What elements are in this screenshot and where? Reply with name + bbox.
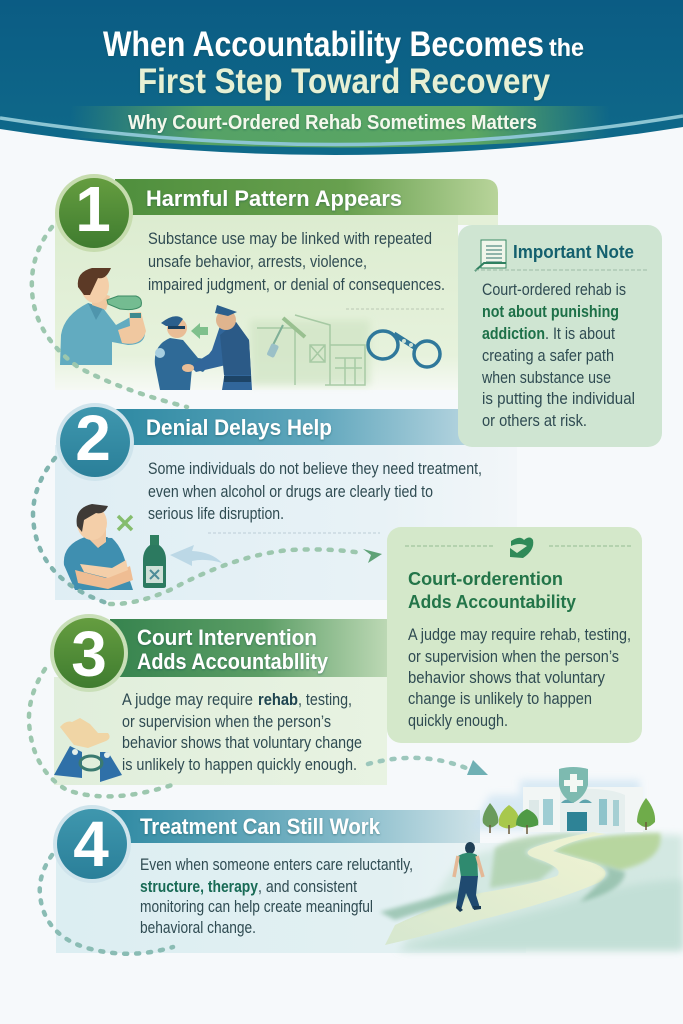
step 3 body text: is unlikely to happen quickly enough. xyxy=(122,756,357,774)
note body text: not about punishing xyxy=(482,303,619,321)
icon: crossed out bottle xyxy=(143,535,166,588)
step 3 heading: Adds Accountabllity xyxy=(137,649,329,674)
note body text: is putting the individual xyxy=(482,390,635,408)
step 2 body text: serious life disruption. xyxy=(148,505,284,523)
callout: important note xyxy=(458,225,662,447)
step 4 body text xyxy=(140,856,413,937)
step 1 header bar xyxy=(115,179,498,215)
step 1 number badge xyxy=(55,173,133,252)
note body text: when substance use xyxy=(481,369,611,387)
step 1 heading: Harmful Pattern Appears xyxy=(146,186,402,211)
step 4 header bar xyxy=(110,810,480,843)
dashed connectors xyxy=(29,227,187,954)
step 3 number badge: 3 xyxy=(71,618,107,690)
step 1 number badge: 1 xyxy=(75,173,111,245)
subtitle ribbon xyxy=(70,106,610,148)
step 1 body text: impaired judgment, or denial of consequences. xyxy=(148,276,445,294)
header banner xyxy=(0,0,683,155)
card body text xyxy=(408,626,631,730)
subtitle: Why Court-Ordered Rehab Sometimes Matters xyxy=(128,112,537,134)
card heading xyxy=(408,568,577,612)
step 3 body text: or supervision when the person’s xyxy=(122,713,331,731)
step 3 body text: rehab xyxy=(258,691,298,709)
card body text: or supervision when the person’s xyxy=(408,648,619,666)
building xyxy=(470,767,643,832)
step 1 body text xyxy=(148,230,445,294)
panel: step 1 xyxy=(55,173,498,390)
step 4 body text: structure, therapy xyxy=(140,878,259,896)
illustration: hands and cuffs xyxy=(54,718,122,782)
title small word: the xyxy=(549,34,584,62)
step 2 heading: Denial Delays Help xyxy=(146,415,332,440)
note body text: addiction xyxy=(482,325,545,343)
step 4 number badge xyxy=(53,805,131,883)
icon: heart arrows xyxy=(510,538,533,558)
step 2 number badge: 2 xyxy=(75,402,111,474)
step 3 header bar xyxy=(110,619,387,677)
title line two: First Step Toward Recovery xyxy=(138,62,550,101)
step 4 number badge: 4 xyxy=(73,808,109,880)
card heading: Court-orderention xyxy=(408,568,563,589)
step 3 body text: , testing, xyxy=(298,691,352,709)
step 1 body text: Substance use may be linked with repeated xyxy=(148,230,432,248)
step 3 body text xyxy=(122,691,362,774)
panel: step 3 xyxy=(50,614,488,785)
note body text: Court-ordered rehab is xyxy=(482,281,626,299)
step 4 body text: behavioral change. xyxy=(140,919,256,937)
icon: document xyxy=(475,240,506,271)
illustration: man drinking xyxy=(60,268,146,365)
illustration: faded building xyxy=(250,315,370,385)
step 3 heading xyxy=(137,625,329,674)
step 3 body text: A judge may require xyxy=(122,691,253,709)
step 3 number badge xyxy=(50,614,128,692)
step 4 body text: , and consistent xyxy=(258,878,357,896)
step 3 heading: Court Intervention xyxy=(137,625,317,650)
trees xyxy=(483,798,655,834)
title line one: When Accountability Becomes xyxy=(103,25,544,64)
callout: court order card xyxy=(387,527,642,743)
landscape and hospital xyxy=(380,767,683,950)
panel: step 4 xyxy=(53,767,683,953)
note body text: . It is about xyxy=(545,325,615,343)
illustration: handcuffs xyxy=(368,331,440,367)
card body text: change is unlikely to happen xyxy=(408,690,592,708)
illustration: two officers xyxy=(155,305,252,390)
winding path xyxy=(385,832,606,945)
note body text: or others at risk. xyxy=(482,412,587,430)
card body text: behavior shows that voluntary xyxy=(408,669,606,687)
card heading: Adds Accountability xyxy=(408,591,577,612)
card body text: quickly enough. xyxy=(408,712,508,730)
step 3 body text: behavior shows that voluntary change xyxy=(122,734,362,752)
arrow between officers xyxy=(191,323,208,339)
step 2 body text: Some individuals do not believe they need treatment, xyxy=(148,460,482,478)
step 4 body text: monitoring can help create meaningful xyxy=(140,898,373,916)
note body text: creating a safer path xyxy=(482,347,614,365)
panel: step 2 xyxy=(55,402,517,604)
connector arrow to hospital xyxy=(368,758,488,775)
note body text xyxy=(481,281,635,430)
note heading: Important Note xyxy=(513,242,634,262)
card body text: A judge may require rehab, testing, xyxy=(408,626,631,644)
arrow: pale blue return xyxy=(170,545,222,566)
connector arrow to center card xyxy=(110,549,382,604)
illustration: man with crossed arms xyxy=(64,504,133,590)
step 4 body text: Even when someone enters care reluctantly, xyxy=(140,856,413,874)
step 2 number badge xyxy=(56,402,134,481)
step 2 header bar xyxy=(115,409,517,445)
walking person xyxy=(454,842,483,912)
step 4 heading: Treatment Can Still Work xyxy=(140,814,381,839)
step 2 body text: even when alcohol or drugs are clearly tied to xyxy=(148,483,433,501)
step 1 body text: unsafe behavior, arrests, violence, xyxy=(148,253,367,271)
icon: green cross xyxy=(118,516,132,530)
step 2 body text xyxy=(148,460,482,523)
